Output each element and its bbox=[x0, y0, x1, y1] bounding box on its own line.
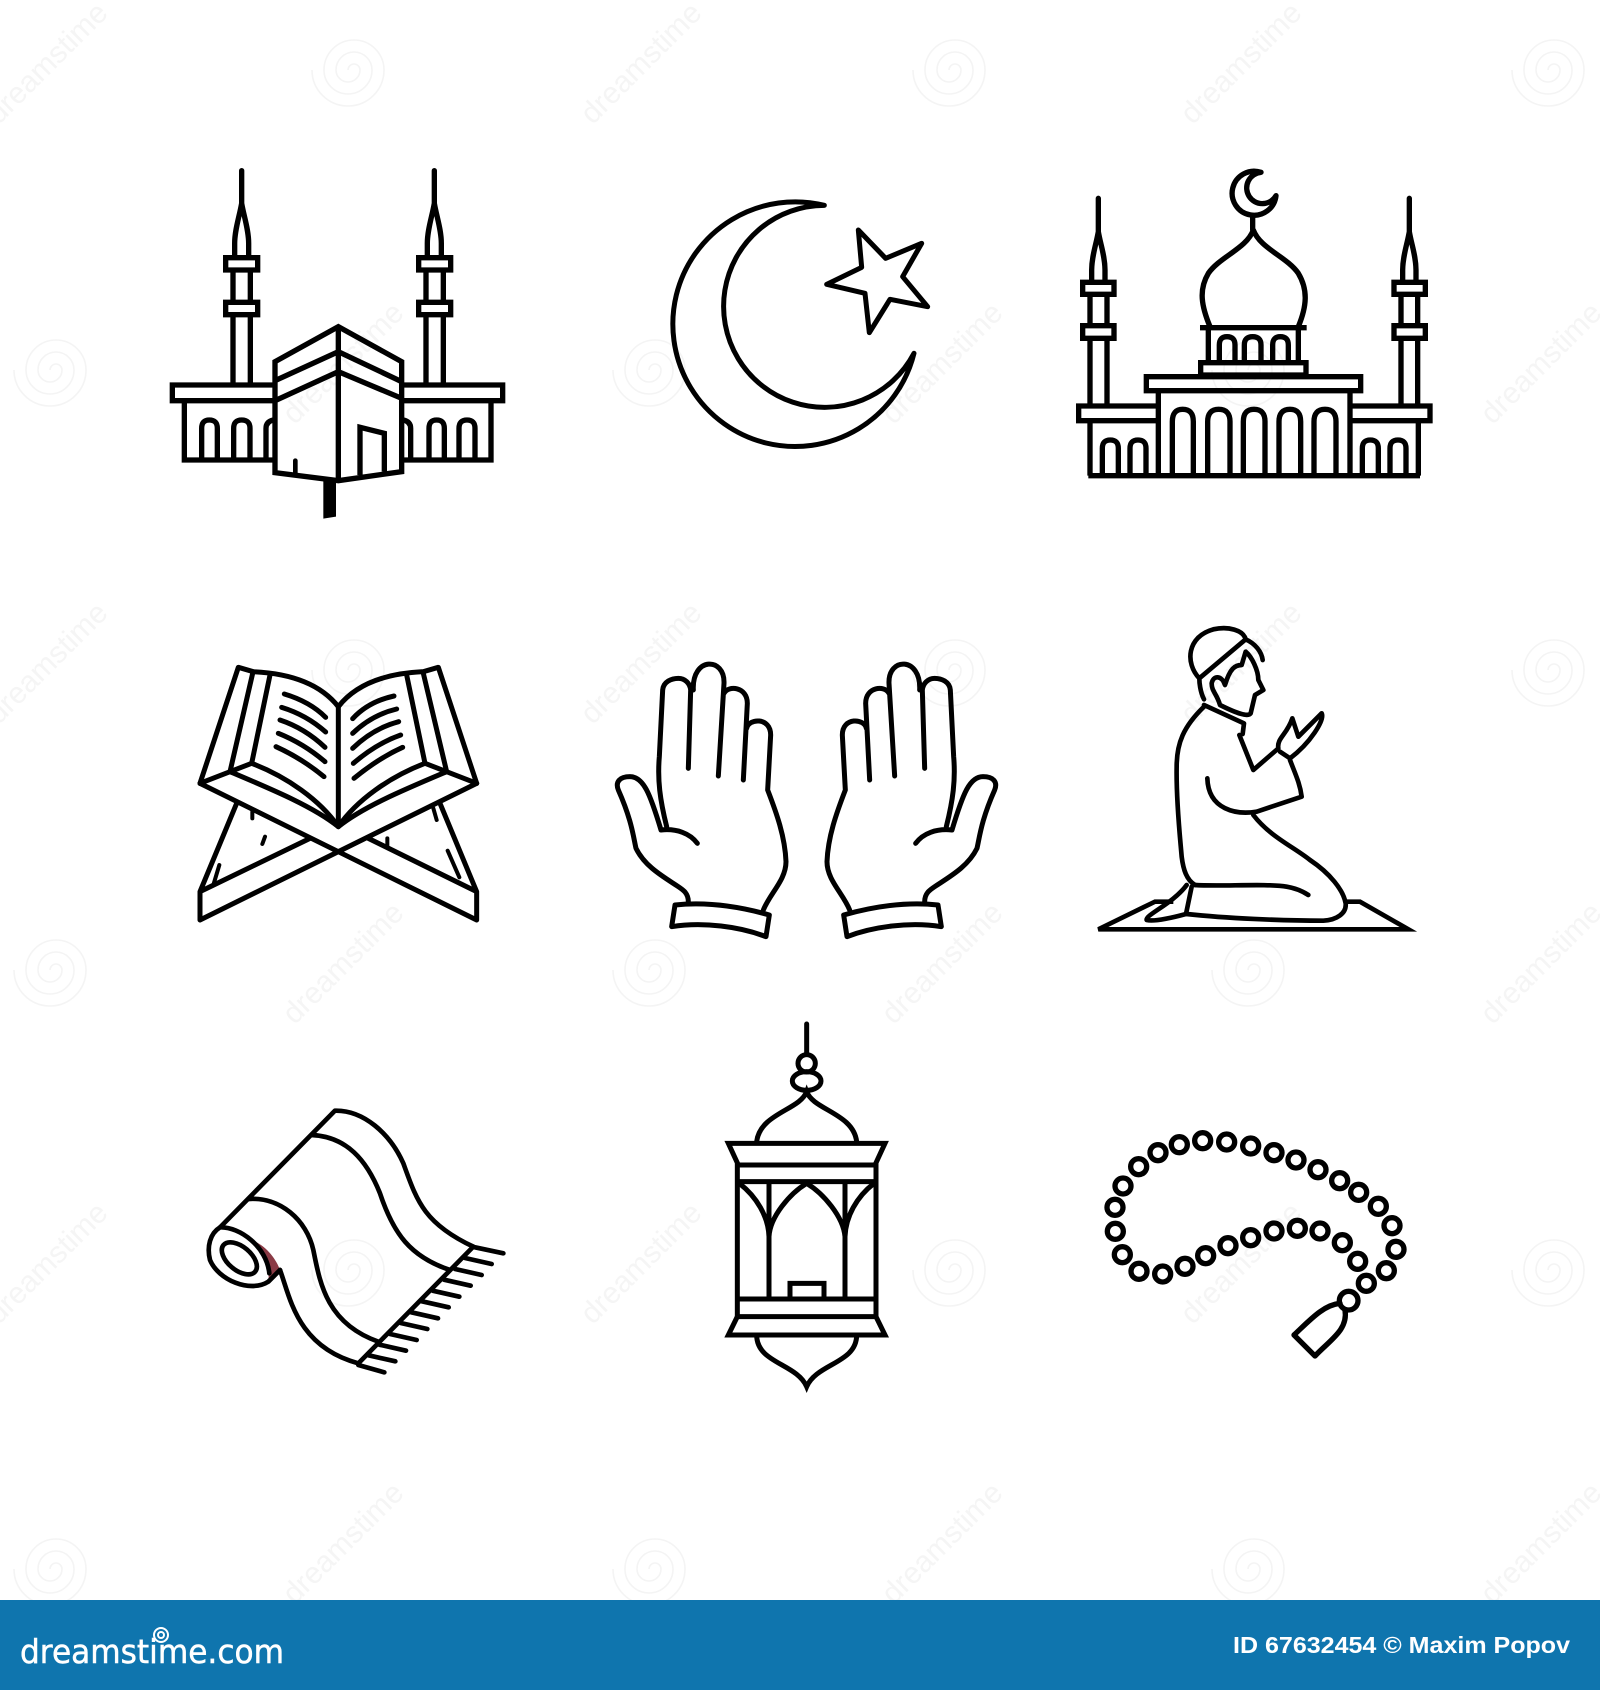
infographic: islamic icon set: dreamstime bbox=[1174, 596, 1308, 730]
icon: kaaba with minarets bbox=[172, 171, 503, 519]
icon: crescent and star bbox=[673, 202, 928, 446]
icon: lantern bbox=[728, 1024, 885, 1387]
infographic: islamic icon set: dreamstime bbox=[875, 1476, 1009, 1610]
infographic: islamic icon set: dreamstime bbox=[1174, 0, 1308, 130]
icon: mosque with dome bbox=[1079, 171, 1430, 476]
icon: prayer beads bbox=[1107, 1133, 1404, 1356]
infographic: islamic icon set: dreamstime bbox=[875, 296, 1009, 430]
footer bar bbox=[0, 1600, 1600, 1690]
infographic: islamic icon set: dreamstime bbox=[574, 1196, 708, 1330]
footer logo text: dreamstime.com bbox=[20, 1632, 284, 1671]
infographic: islamic icon set: dreamstime bbox=[1174, 1196, 1308, 1330]
right hand bbox=[827, 664, 996, 937]
left hand bbox=[617, 664, 786, 937]
image id and copyright: ID 67632454 © Maxim Popov bbox=[1233, 1632, 1570, 1658]
icon: praying hands bbox=[617, 664, 996, 937]
footer logo spiral bbox=[154, 1628, 168, 1642]
infographic: islamic icon set: dreamstime bbox=[276, 896, 410, 1030]
infographic: islamic icon set: dreamstime bbox=[276, 296, 410, 430]
icon: open book on stand bbox=[200, 667, 477, 920]
infographic: islamic icon set: dreamstime bbox=[875, 896, 1009, 1030]
icon: kneeling man praying on mat bbox=[1098, 628, 1408, 929]
infographic: islamic icon set: dreamstime bbox=[276, 1476, 410, 1610]
infographic: islamic icon set: dreamstime bbox=[574, 596, 708, 730]
infographic: islamic icon set: dreamstime bbox=[574, 0, 708, 130]
icon: rolled prayer rug bbox=[209, 1111, 503, 1372]
